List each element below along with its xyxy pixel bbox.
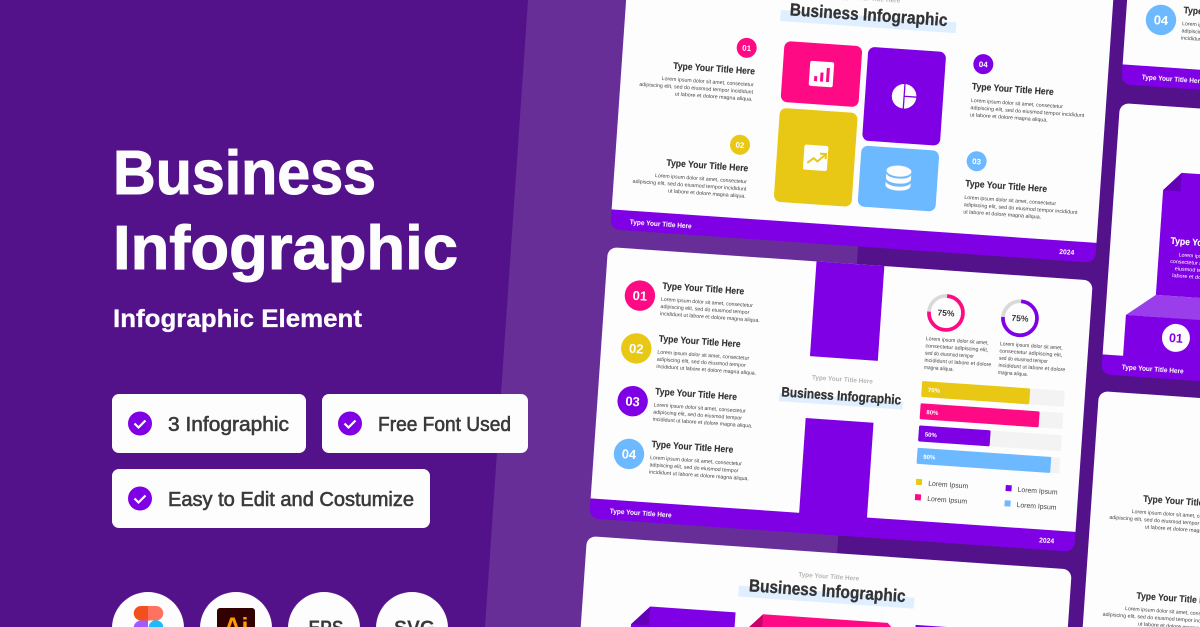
footer: Type Your Title Here: [630, 219, 692, 230]
item 03: Lorem ipsum dolor sit amet, consectetur: [964, 195, 1057, 207]
list item 01: adipiscing elit, sed do eiusmod tempor: [660, 304, 750, 316]
step block lower: [1123, 315, 1200, 371]
step text: [1168, 236, 1200, 284]
step badge 01: 01: [1168, 331, 1183, 346]
list item 03: Lorem ipsum dolor sit amet, consectetur: [653, 402, 746, 415]
list item 01: Type Your Title Here: [662, 281, 745, 297]
donut chart 2: magna aliqua.: [998, 370, 1028, 378]
list item 04: adipiscing elit, sed do eiusmod tempor: [649, 462, 739, 474]
bar chart: 80%: [926, 410, 939, 417]
item 02: adipiscing elit, sed do eiusmod tempor incididunt: [632, 179, 747, 193]
legend: Lorem Ipsum: [1017, 487, 1058, 497]
panel: slide with four squares: [610, 0, 1114, 263]
item 04: Lorem ipsum dolor sit amet, consectetur: [971, 98, 1063, 110]
bar chart: [917, 381, 1065, 474]
slide title: Business Infographic: [789, 0, 948, 30]
donut chart 1: sed do eiusmod tempor: [925, 350, 974, 360]
list item 02: Type Your Title Here: [658, 334, 741, 350]
footer: [630, 219, 1075, 257]
item 02: Type Your Title Here: [666, 158, 749, 174]
subtitle: Infographic Element: [113, 305, 363, 333]
panel: top right slide: [1121, 0, 1200, 118]
list item 02: adipiscing elit, sed do eiusmod tempor: [657, 357, 746, 369]
slide title: Type Your Title Here: [798, 571, 860, 583]
list item 04: Lorem ipsum dolor sit amet, consectetur: [650, 455, 742, 467]
donut chart 1: incididunt ut labore et dolore: [924, 358, 992, 368]
item 02: [632, 128, 751, 200]
donut chart 1: magna aliqua.: [924, 365, 954, 373]
list item 03: Type Your Title Here: [655, 386, 737, 403]
step platform: [1126, 293, 1200, 330]
legend: Lorem Ipsum: [928, 481, 969, 490]
square: pink chart: [780, 41, 862, 107]
slide title: [779, 372, 904, 410]
item 04: ut labore et dolore magna aliqua.: [970, 112, 1048, 124]
panel: slide with list and charts: [589, 247, 1093, 552]
step badge 01: [1161, 323, 1191, 353]
title: Business: [113, 139, 376, 208]
item 03: [963, 151, 1082, 223]
panel: slide with 3D blocks: [568, 536, 1072, 627]
list item 04: incididunt ut labore et dolore magna aliqua.: [649, 469, 749, 482]
item 03: ut labore et dolore magna aliqua.: [963, 209, 1041, 221]
slide title: Business Infographic: [781, 384, 902, 408]
item 03: Type Your Title Here: [965, 178, 1047, 195]
list item 01: Lorem ipsum dolor sit amet, consectetur: [661, 297, 753, 309]
item 03: adipiscing elit, sed do eiusmod tempor incididunt: [964, 202, 1078, 216]
title: [113, 139, 458, 283]
item 02: ut labore et dolore magna aliqua.: [668, 188, 746, 200]
footer: 2024: [1059, 249, 1075, 257]
list item 03: adipiscing elit, sed do eiusmod tempor: [653, 410, 742, 422]
feature: Free Font Used: [322, 394, 528, 453]
footer: 2024: [1039, 537, 1054, 545]
item text 2: [1102, 589, 1200, 627]
item 01: ut labore et dolore magna aliqua.: [675, 91, 753, 103]
donut chart 2: [998, 300, 1070, 381]
item 01: Lorem ipsum dolor sit amet, consectetur: [662, 76, 754, 88]
donut chart 2: sed do eiusmod tempor: [999, 356, 1048, 365]
block: purple: [626, 605, 736, 627]
list item 04: 04: [1153, 12, 1169, 28]
icon: SVG: [376, 592, 448, 627]
legend: [915, 479, 1058, 512]
list item 03: incididunt ut labore et dolore magna aliqua.: [653, 417, 753, 430]
bar chart: 70%: [928, 388, 941, 395]
square: purple pie: [862, 47, 946, 146]
legend: Lorem Ipsum: [1016, 502, 1057, 512]
donut chart 2: 75%: [1011, 313, 1029, 324]
icon: Adobe Illustrator: [200, 592, 272, 627]
legend: Lorem Ipsum: [927, 496, 967, 506]
slide title: Business Infographic: [748, 575, 907, 606]
item 02: Lorem ipsum dolor sit amet, consectetur: [655, 173, 747, 185]
bar chart: 90%: [923, 455, 936, 462]
block: purple right: [909, 625, 995, 627]
item 01: Type Your Title Here: [673, 61, 755, 77]
list item 04: [1144, 3, 1200, 48]
icon: Figma: [112, 592, 184, 627]
item 02: 02: [735, 140, 745, 150]
list item 02: [620, 331, 758, 377]
footer: Type Your Title Here: [610, 508, 672, 520]
square: yellow trend: [774, 108, 858, 207]
center purple panels: [799, 261, 884, 518]
bar chart: 50%: [925, 432, 938, 439]
slide title: Type Your Title Here: [812, 374, 873, 386]
list item 04: Type Your Title Here: [651, 439, 734, 456]
feature: 3 Infographic: 3 Infographic: [168, 414, 289, 436]
list item 04: 04: [621, 446, 637, 462]
item text 1: [1109, 492, 1200, 536]
donut chart 1: [924, 295, 996, 375]
item 01: [639, 31, 757, 103]
list item 02: 02: [629, 341, 644, 357]
donut chart 1: 75%: [937, 307, 955, 319]
list item 03: 03: [625, 393, 640, 409]
square: blue database: [857, 145, 939, 212]
list item 01: 01: [632, 288, 648, 304]
feature: 3 Infographic: [112, 394, 306, 453]
list item 02: Lorem ipsum dolor sit amet, consectetur: [657, 350, 750, 362]
list item 02: incididunt ut labore et dolore magna aliqua.: [656, 364, 756, 377]
block: pink: [739, 613, 892, 627]
donut chart 1: consectetur adipiscing elit,: [925, 343, 988, 354]
step block upper: [1156, 172, 1200, 307]
icon: EPS: [288, 592, 360, 627]
item 03: 03: [972, 157, 982, 167]
title: Infographic: [113, 214, 458, 283]
donut chart 2: Lorem ipsum dolor sit amet,: [1000, 341, 1063, 352]
feature: Easy to Edit and Costumize: Easy to Edit and Costumize: [168, 489, 414, 511]
item 04: 04: [979, 60, 989, 69]
footer: Type Your Title Here: [1122, 364, 1184, 376]
item 04: adipiscing elit, sed do eiusmod tempor incididunt: [970, 105, 1085, 119]
item 04: Type Your Title Here: [972, 81, 1054, 98]
list item 04: [612, 437, 751, 482]
item 04: [970, 53, 1089, 126]
list item 01: [623, 278, 762, 324]
feature: Easy to Edit and Costumize: [112, 469, 430, 528]
donut chart 1: Lorem ipsum dolor sit amet,: [926, 336, 989, 346]
list item 01: incididunt ut labore et dolore magna aliqua.: [660, 311, 760, 324]
footer: [610, 508, 1054, 546]
item 01: adipiscing elit, sed do eiusmod tempor incididunt: [639, 82, 754, 96]
donut chart 2: incididunt ut labore et dolore: [998, 363, 1066, 373]
panel: middle right slide with steps: [1101, 103, 1200, 408]
item 01: 01: [742, 44, 752, 53]
panel: bottom right slide: [1080, 391, 1200, 627]
donut chart 2: consectetur adipiscing elit,: [999, 348, 1062, 359]
feature: Free Font Used: Free Font Used: [378, 414, 511, 436]
list item 03: [616, 384, 755, 430]
